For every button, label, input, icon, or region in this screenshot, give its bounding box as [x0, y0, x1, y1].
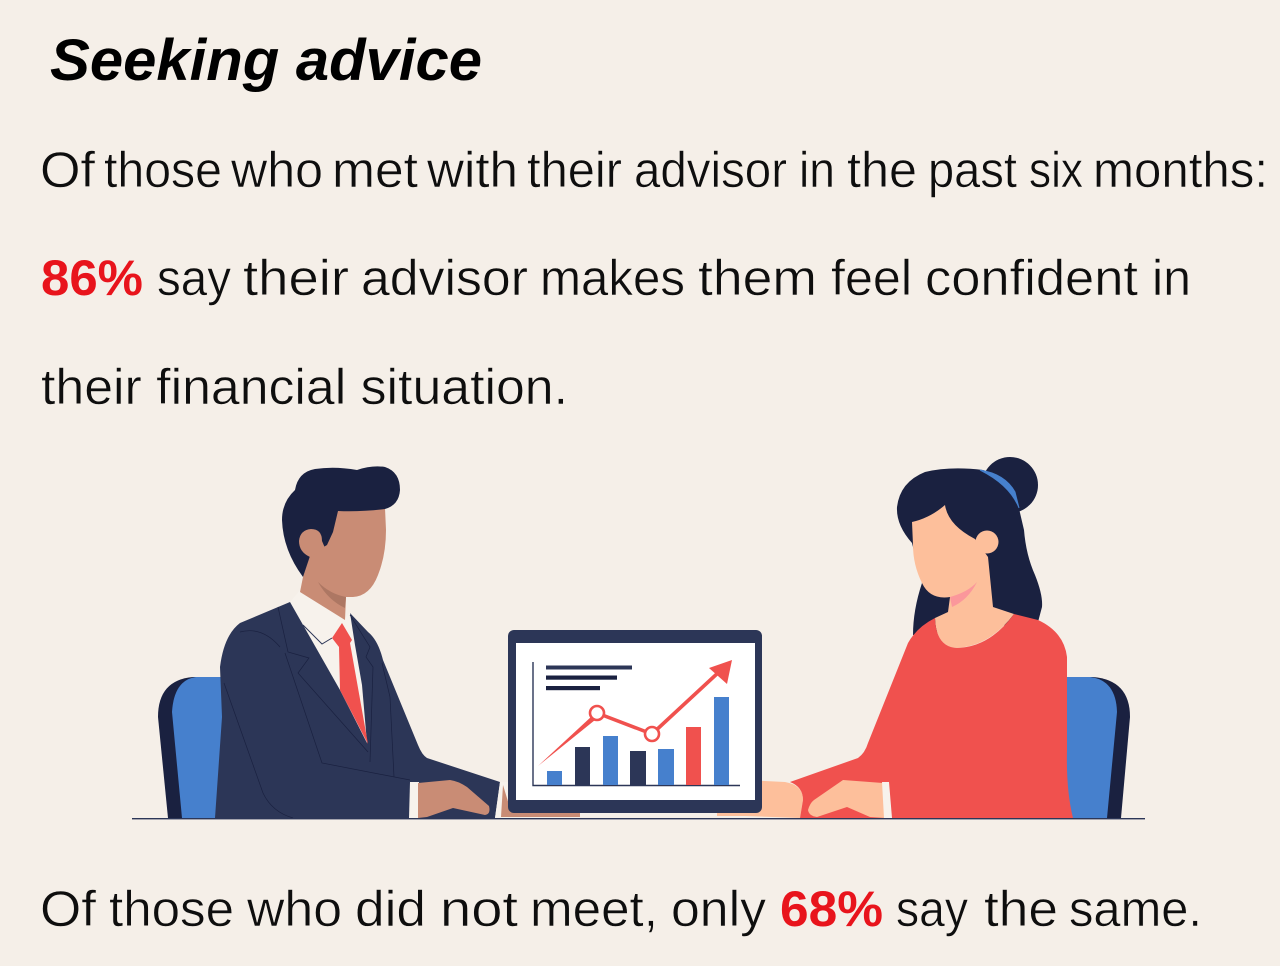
icon: man's far hand — [501, 785, 580, 817]
icon: tablet with chart — [508, 630, 762, 813]
statement first line: say — [157, 250, 231, 306]
stat: 68%: 68% — [780, 881, 883, 937]
icon: man's chair — [158, 677, 222, 818]
comparison lead-in: not — [440, 881, 518, 937]
text block: intro line: Of — [40, 142, 95, 198]
text block: intro line: past — [928, 142, 1017, 198]
comparison ending: the — [984, 881, 1058, 937]
comparison ending: say — [896, 881, 968, 937]
text block: intro line: in — [799, 142, 835, 198]
text block: intro line: the — [847, 142, 917, 198]
statement first line: makes — [540, 250, 685, 306]
statement first line: in — [1152, 250, 1191, 306]
stat: 86%: 86% — [41, 250, 143, 306]
statement first line: feel — [831, 250, 912, 306]
comparison lead-in: did — [355, 881, 426, 937]
text block: intro line: met — [332, 142, 418, 198]
comparison lead-in: only — [671, 881, 766, 937]
table line — [132, 818, 1145, 819]
text block: intro line: six — [1029, 142, 1083, 198]
text block: intro line: with — [426, 142, 518, 198]
comparison lead-in: Of — [40, 881, 96, 937]
text block: intro line: advisor — [634, 142, 787, 198]
comparison lead-in: meet, — [530, 881, 658, 937]
text block: intro line: those — [104, 142, 222, 198]
icon: woman's near hand — [717, 780, 803, 818]
icon: woman's chair — [1060, 677, 1130, 818]
statement first line: confident — [925, 250, 1138, 306]
text block: intro line: their — [527, 142, 622, 198]
bar chart — [547, 697, 729, 785]
text block: comparison statistic — [40, 881, 1202, 937]
comparison lead-in: who — [246, 881, 342, 937]
statement first line: their — [243, 250, 349, 306]
icon: woman adviser — [790, 457, 1073, 818]
statement first line: advisor — [361, 250, 528, 306]
text block: 86% statistic — [41, 250, 1191, 415]
text block: intro line: who — [230, 142, 323, 198]
comparison ending: same. — [1069, 881, 1202, 937]
trend arrow — [538, 660, 732, 766]
chart axes — [533, 662, 740, 786]
comparison lead-in: those — [109, 881, 234, 937]
title: Seeking advice — [50, 28, 482, 93]
tablet frame — [508, 630, 762, 813]
icon: man advisor — [215, 466, 508, 818]
illustration: advisor meeting — [132, 457, 1145, 819]
statement second line: their financial situation. — [41, 359, 568, 415]
text block: intro line: months: — [1093, 142, 1268, 198]
statement first line: them — [698, 250, 817, 306]
tablet screen — [516, 643, 755, 800]
chart title lines — [546, 666, 632, 690]
